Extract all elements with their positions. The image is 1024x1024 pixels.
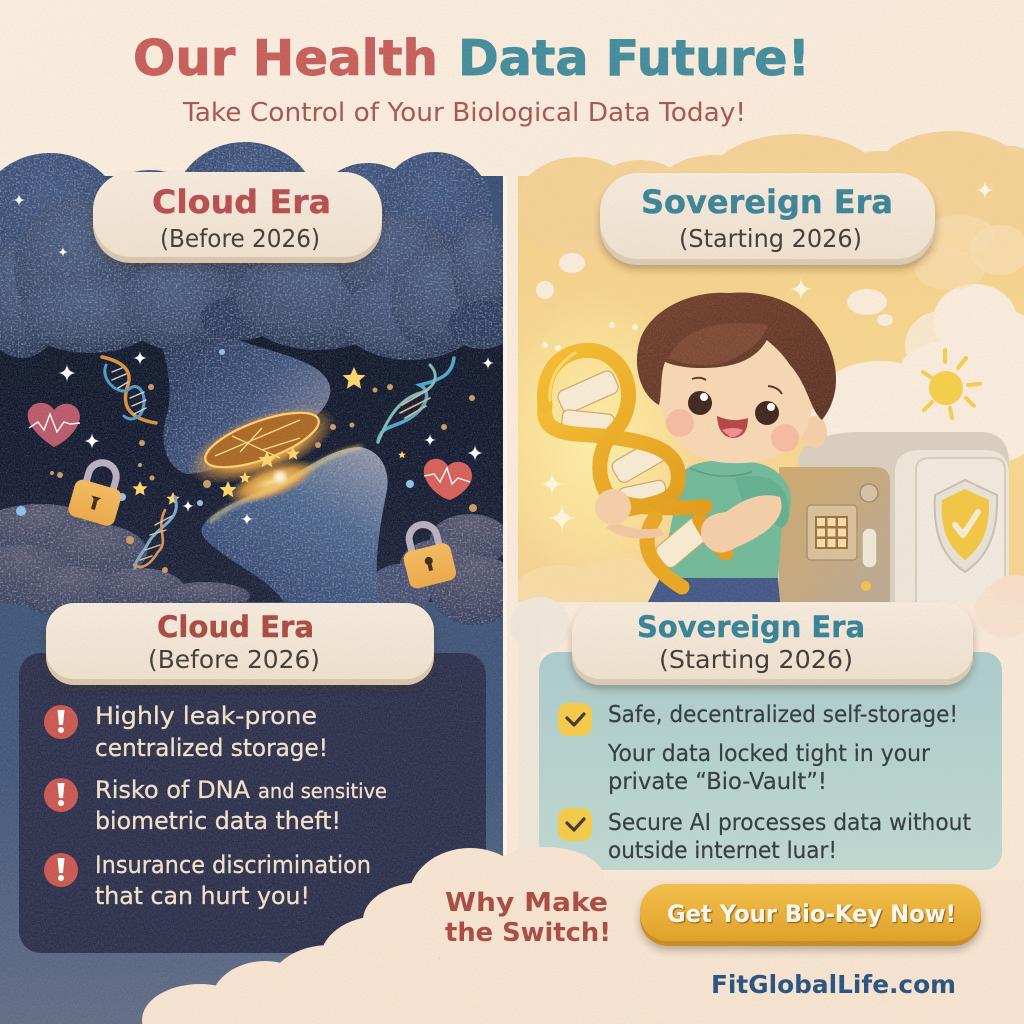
broken cloud: upper half	[162, 336, 330, 474]
white clouds	[800, 215, 1024, 462]
child: eyes	[688, 378, 782, 425]
panel: cloud era list	[19, 653, 486, 953]
pill: sovereign era top	[600, 173, 935, 265]
item: secure AI	[558, 808, 971, 864]
DNA rungs	[556, 369, 711, 570]
icon: padlock left	[68, 459, 122, 526]
child: head and hair	[637, 292, 836, 463]
child: mouth	[717, 416, 748, 438]
pill: sovereign era top: Sovereign Era	[641, 183, 893, 221]
pill: cloud era list header: Cloud Era	[157, 610, 314, 644]
child: body	[648, 460, 791, 602]
broken cloud: lower half	[202, 447, 388, 602]
item: leak-prone: Highly leak-prone	[95, 702, 317, 730]
glowing rupture	[132, 367, 406, 522]
icon: shield check	[935, 480, 997, 572]
why make the switch: the Switch!	[445, 918, 611, 948]
icon: DNA bottom	[134, 497, 176, 568]
icon: gold DNA helix	[545, 350, 726, 587]
small clouds	[536, 253, 893, 326]
gold sparkles	[541, 181, 994, 532]
sparkles and debris	[13, 194, 494, 573]
icon: heart right	[424, 459, 472, 500]
pill: sovereign era list header: Sovereign Era	[637, 610, 865, 644]
safe	[779, 432, 1009, 602]
pill: cloud era list header: (Before 2026)	[148, 645, 320, 674]
item: bio-vault: private “Bio-Vault”!	[608, 769, 827, 795]
golden clouds	[516, 131, 1024, 253]
icon: warning	[44, 778, 78, 812]
why make the switch	[445, 888, 611, 948]
item: DNA theft: biometric data theft!	[95, 807, 341, 835]
safe keypad	[807, 505, 857, 560]
icon: DNA orange	[102, 357, 156, 423]
icon: heart left	[28, 403, 80, 447]
safe knob	[860, 484, 878, 502]
item: insurance	[44, 851, 371, 910]
panel: sovereign era illustration	[490, 131, 1024, 622]
item: DNA theft	[44, 776, 387, 835]
icon: warning	[44, 853, 78, 887]
lower golden clouds	[518, 558, 659, 602]
title	[133, 30, 810, 87]
pill: cloud era top	[93, 172, 382, 263]
icon: padlock right	[404, 521, 456, 588]
bottom cream cloud	[142, 847, 1024, 1024]
lower right cream clouds	[510, 575, 1024, 855]
lower dark clouds	[0, 504, 520, 625]
panel: cloud era illustration	[0, 142, 520, 1024]
item: secure AI: outside internet luar!	[608, 838, 837, 864]
icon: check	[558, 808, 592, 841]
item: self-storage: Safe, decentralized self-storage!	[608, 702, 958, 728]
item: insurance: that can hurt you!	[95, 882, 310, 910]
storm clouds	[0, 142, 516, 360]
item: leak-prone: centralized storage!	[95, 734, 328, 762]
pill: sovereign era top: (Starting 2026)	[679, 224, 862, 253]
icon: check	[558, 703, 592, 736]
pill: cloud era top: Cloud Era	[152, 183, 331, 221]
item: DNA theft: Risko of DNA	[95, 776, 251, 804]
website: FitGlobalLife.com	[711, 970, 956, 999]
button: get your bio-key	[640, 884, 981, 946]
icon: warning	[44, 705, 78, 739]
pill: cloud era list header	[46, 603, 434, 685]
item: bio-vault	[607, 741, 931, 795]
title: Our Health	[133, 30, 438, 87]
item: DNA theft: and sensitive	[258, 779, 387, 803]
item: leak-prone	[44, 702, 328, 762]
item: bio-vault: Your data locked tight in your	[607, 741, 931, 767]
pill: sovereign era list header	[572, 603, 973, 685]
title: Data Future!	[458, 30, 810, 87]
item: self-storage	[558, 702, 958, 736]
divider	[503, 176, 507, 876]
safe handle	[862, 528, 877, 568]
bright halo	[522, 330, 668, 552]
pill: sovereign era list header: (Starting 2026)	[659, 645, 853, 674]
pill: cloud era top: (Before 2026)	[160, 224, 320, 253]
panel: sovereign era list	[539, 652, 1002, 870]
why make the switch: Why Make	[445, 888, 608, 918]
item: secure AI: Secure AI processes data without	[608, 810, 971, 836]
subtitle: Take Control of Your Biological Data Today!	[182, 98, 746, 128]
button: get your bio-key: Get Your Bio-Key Now!	[667, 900, 956, 928]
child: hands and arm	[595, 489, 782, 552]
icon: DNA teal	[378, 358, 454, 442]
icon: sun	[923, 350, 980, 418]
item: insurance: Insurance discrimination	[95, 851, 371, 879]
child: cheeks	[666, 409, 799, 452]
